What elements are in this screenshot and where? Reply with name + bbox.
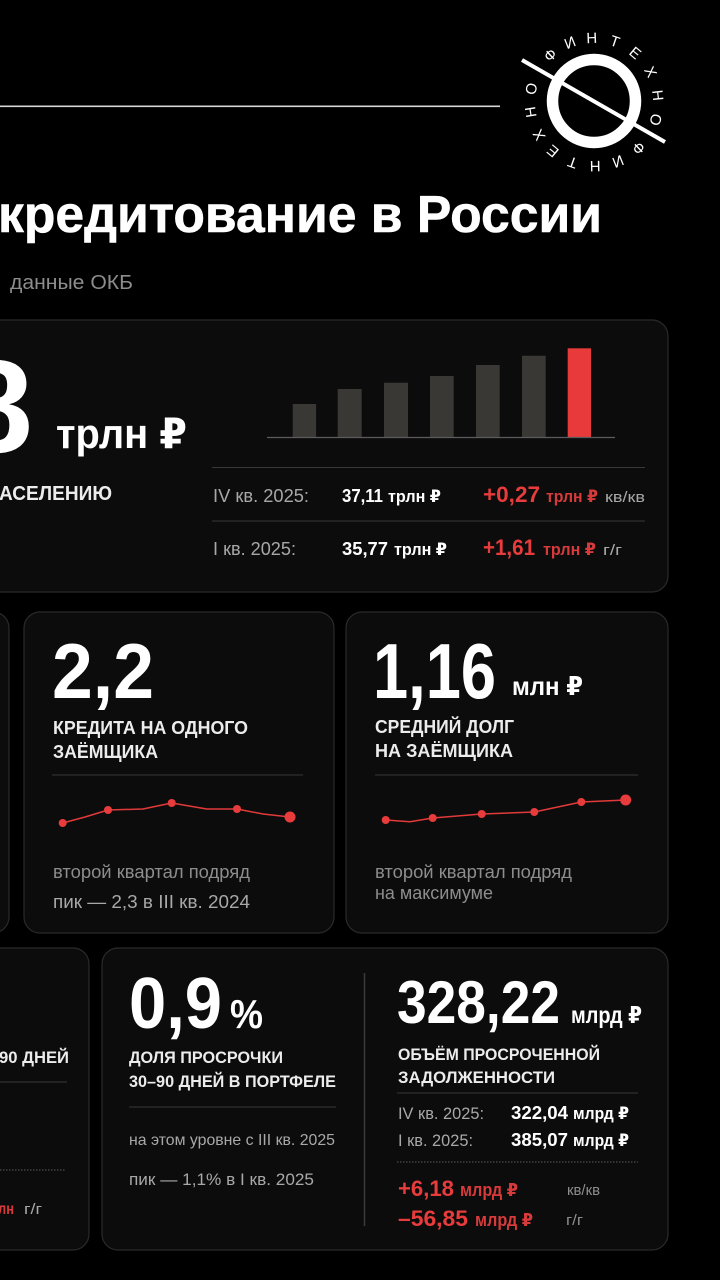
big number unit: трлн ₽ [56,410,187,457]
overdue volume value: 328,22 [397,969,560,1036]
notes: второй квартал подряд [53,862,251,882]
logo: ФИНТЕХНО ring: О [522,81,541,96]
comparison rows: I кв. 2025: [398,1131,473,1150]
label: НА ЗАЁМЩИКА [375,741,513,761]
line chart [59,799,296,827]
overdue share notes: пик — 1,1% в I кв. 2025 [129,1170,314,1189]
overdue volume label: ЗАДОЛЖЕННОСТИ [398,1068,555,1087]
row: IV quarter 2025: трлн ₽ [546,487,598,506]
row: I quarter 2025 [213,535,623,560]
change rows: млрд ₽ [475,1210,533,1230]
label: СРЕДНИЙ ДОЛГ [375,716,514,737]
logo: ФИНТЕХНО ring: Н [586,30,597,47]
change rows: кв/кв [567,1182,600,1199]
clipped label: 90 ДНЕЙ [0,1048,69,1067]
change rows [398,1176,600,1231]
header rule [0,106,500,107]
logo: ФИНТЕХНО ring: Н [648,89,666,102]
notes [53,862,251,912]
notes [375,862,573,903]
logo: ФИНТЕХНО ring: И [562,33,578,53]
row: I quarter 2025: 35,77 [342,538,388,559]
change rows: млрд ₽ [460,1180,518,1200]
logo: ФИНТЕХНО ring: Н [590,157,601,174]
comparison rows [398,1103,629,1150]
row: IV quarter 2025: 37,11 [342,486,383,506]
logo: ФИНТЕХНО ring: Н [522,105,541,119]
overdue share notes: на этом уровне с III кв. 2025 [129,1132,335,1149]
row: IV quarter 2025: кв/кв [605,489,645,506]
panel: credits per borrower [24,612,334,933]
logo: ФИНТЕХНО ring: Е [626,44,644,63]
logo: ФИНТЕХНО ring: И [610,151,626,171]
label [375,716,514,761]
percent sign: % [230,991,263,1037]
row: IV quarter 2025: +0,27 [483,482,540,507]
notes: второй квартал подряд [375,862,573,882]
change rows: –56,85 [398,1206,468,1231]
logo: ФИНТЕХНО ring: Х [640,64,660,81]
row: I quarter 2025: +1,61 [483,535,535,560]
logo: ФИНТЕХНО ring: Т [608,32,622,51]
panel: average debt per borrower [346,612,668,933]
comparison rows: 322,04 [511,1103,568,1123]
overdue share label [129,1048,336,1091]
comparison rows: 385,07 [511,1130,568,1150]
label: КРЕДИТА НА ОДНОГО [53,718,248,738]
overdue share label: 30–90 ДНЕЙ В ПОРТФЕЛЕ [129,1072,336,1091]
period tag: г/г [24,1201,43,1218]
label: ЗАЁМЩИКА [53,742,158,762]
overdue volume label [398,1045,600,1087]
overdue share value: 0,9 [129,964,222,1044]
panel label: АСЕЛЕНИЮ [0,483,112,505]
bar chart [267,348,615,438]
value: 1,16 [373,627,496,715]
title: кредитование в России [0,186,602,244]
logo: ФИНТЕХНО ring: Е [544,141,562,160]
logo: ФИНТЕХНО ring: О [645,112,665,127]
logo: ФИНТЕХНО ring: Х [530,126,549,143]
row: I quarter 2025: I кв. 2025: [213,539,296,559]
source note: данные ОКБ [10,272,133,294]
overdue volume unit: млрд ₽ [571,1002,642,1028]
row: IV quarter 2025: IV кв. 2025: [213,486,309,506]
row: I quarter 2025: г/г [603,542,623,559]
logo: ФИНТЕХНО ring: Ф [628,138,648,158]
panel: overdue share and volume [102,948,668,1250]
overdue share label: ДОЛЯ ПРОСРОЧКИ [129,1048,283,1067]
panel: total debt to population [0,320,668,592]
comparison rows: млрд ₽ [573,1104,629,1123]
logo: ФИНТЕХНО ring: Т [566,152,580,171]
unit: млн ₽ [512,671,583,701]
change rows: г/г [566,1212,584,1229]
row: I quarter 2025: трлн ₽ [543,540,596,559]
change rows: +6,18 [398,1176,454,1201]
label [53,718,248,762]
overdue volume label: ОБЪЁМ ПРОСРОЧЕННОЙ [398,1045,600,1064]
notes: на максимуме [375,883,493,903]
logo: ФИНТЕХНО ring: Ф [541,45,561,66]
value: 2,2 [52,627,154,715]
comparison rows: млрд ₽ [573,1131,629,1150]
comparison rows: IV кв. 2025: [398,1104,484,1123]
row: IV quarter 2025: трлн ₽ [388,487,441,506]
panel: clipped left card, bottom row [0,948,89,1250]
overdue share notes [129,1132,335,1189]
logo: ФИНТЕХНО ring [522,30,666,174]
row: I quarter 2025: трлн ₽ [394,540,447,559]
line chart [382,794,631,824]
panel: clipped left card, middle row [0,612,9,933]
notes: пик — 2,3 в III кв. 2024 [53,892,250,912]
row: IV quarter 2025 [213,482,645,507]
